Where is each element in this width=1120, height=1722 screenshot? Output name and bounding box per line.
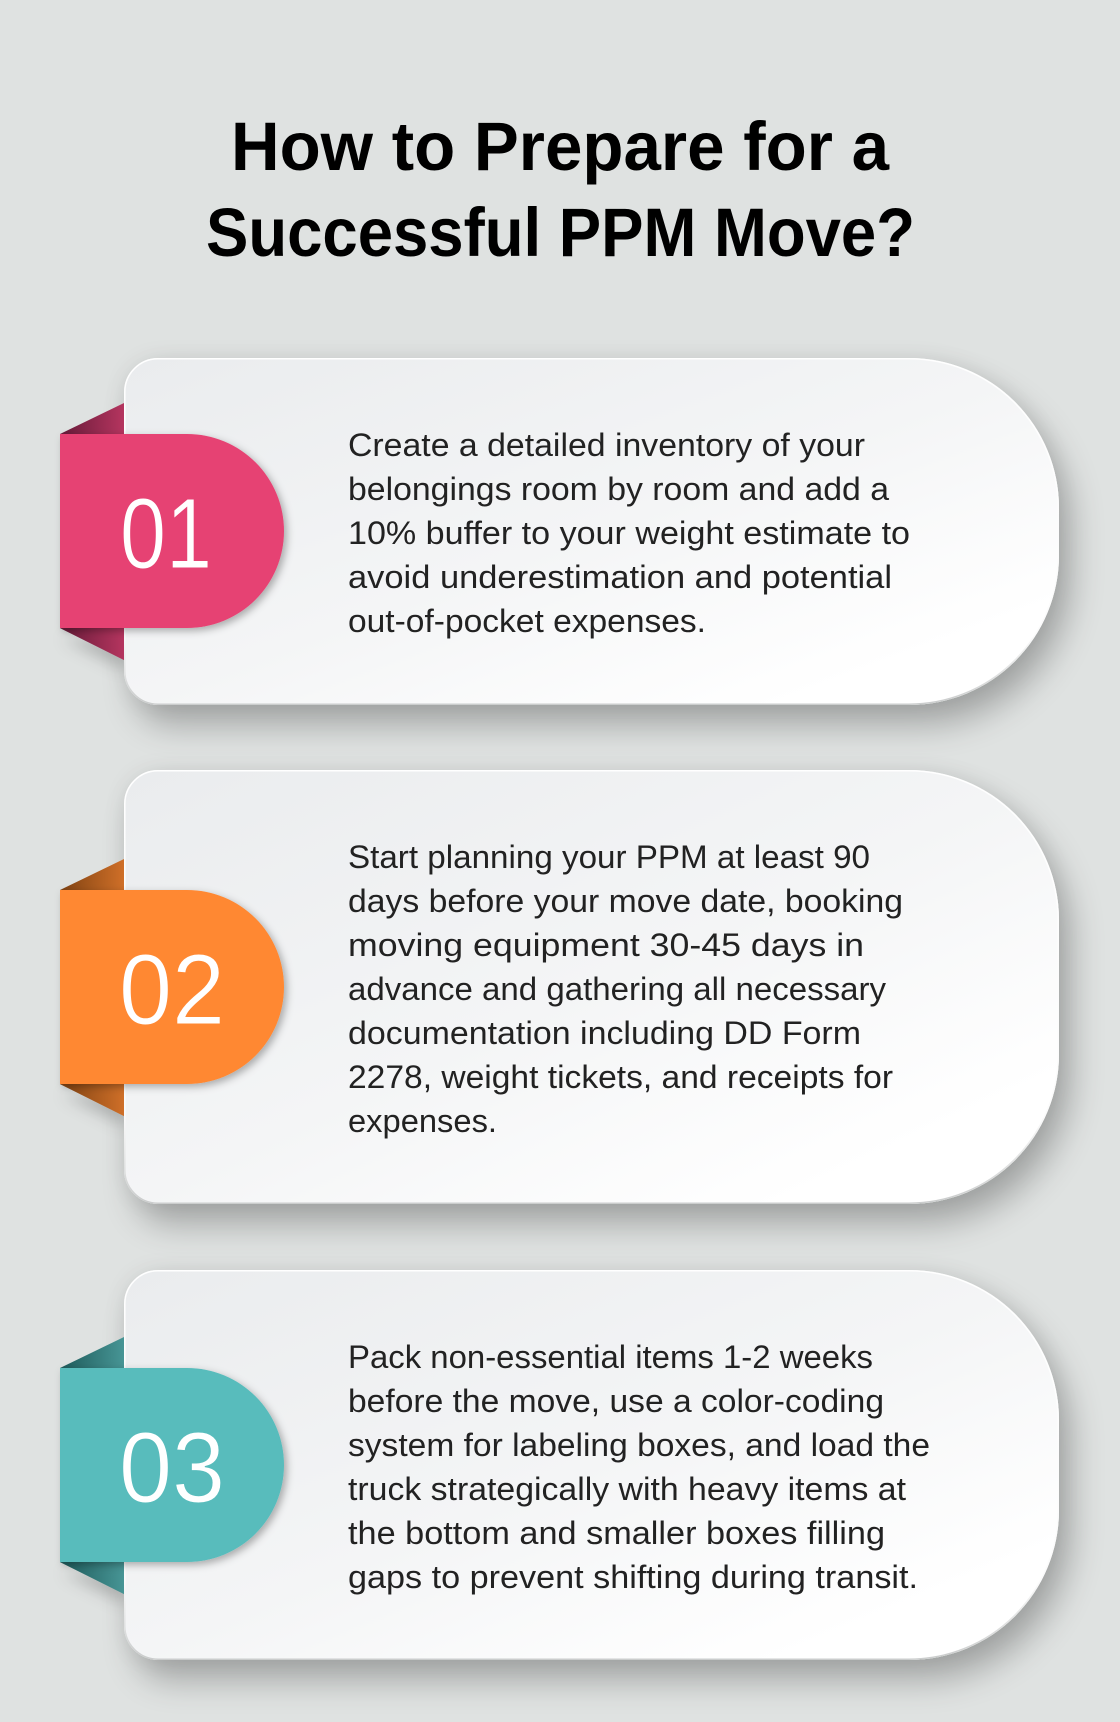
text 3: [348, 1339, 930, 1595]
text 1: belongings room by room and add a: [348, 471, 889, 507]
text 3: truck strategically with heavy items at: [348, 1471, 906, 1507]
title: [206, 108, 915, 271]
text 1: Create a detailed inventory of your: [348, 427, 865, 463]
card 3 edge: [125, 1271, 1058, 1659]
text 3: system for labeling boxes, and load the: [348, 1427, 930, 1463]
panel: step 1: [60, 358, 1059, 705]
title: Successful PPM Move?: [206, 194, 915, 271]
number 03: 03: [119, 1412, 225, 1524]
ribbon fold top 2: [60, 859, 124, 890]
number badge 2: [60, 890, 284, 1084]
number badge 3: [60, 1368, 284, 1562]
ribbon fold bottom 2: [60, 1084, 124, 1116]
text 1: [348, 427, 910, 639]
number 02: 02: [119, 934, 225, 1046]
card 1 edge: [125, 359, 1058, 704]
ribbon fold top 3: [60, 1337, 124, 1368]
text 2: 2278, weight tickets, and receipts for: [348, 1059, 893, 1095]
title: How to Prepare for a: [231, 108, 890, 185]
text 2: Start planning your PPM at least 90: [348, 839, 870, 875]
text 2: moving equipment 30-45 days in: [348, 927, 864, 963]
text 3: the bottom and smaller boxes filling: [348, 1515, 885, 1551]
text 2: advance and gathering all necessary: [348, 971, 886, 1007]
panel: step 3: [60, 1270, 1059, 1660]
ribbon fold shadow 2: [60, 1084, 124, 1116]
text 2: documentation including DD Form: [348, 1015, 861, 1051]
text 3: Pack non-essential items 1-2 weeks: [348, 1339, 873, 1375]
card 2: [124, 770, 1059, 1204]
ribbon fold top 1: [60, 403, 124, 434]
card 2 edge: [125, 771, 1058, 1203]
ribbon fold bottom 1: [60, 628, 124, 660]
ribbon fold shadow 1: [60, 628, 124, 660]
ribbon fold bottom 3: [60, 1562, 124, 1594]
text 1: avoid underestimation and potential: [348, 559, 892, 595]
text 2: [348, 839, 903, 1139]
number badge 1: [60, 434, 284, 628]
text 2: expenses.: [348, 1103, 497, 1139]
ribbon fold shadow 3: [60, 1562, 124, 1594]
text 3: gaps to prevent shifting during transit.: [348, 1559, 918, 1595]
panel: step 2: [60, 770, 1059, 1204]
text 3: before the move, use a color-coding: [348, 1383, 884, 1419]
text 1: 10% buffer to your weight estimate to: [348, 515, 910, 551]
text 2: days before your move date, booking: [348, 883, 903, 919]
number 01: 01: [120, 478, 212, 590]
card 3: [124, 1270, 1059, 1660]
card 1: [124, 358, 1059, 705]
text 1: out-of-pocket expenses.: [348, 603, 706, 639]
